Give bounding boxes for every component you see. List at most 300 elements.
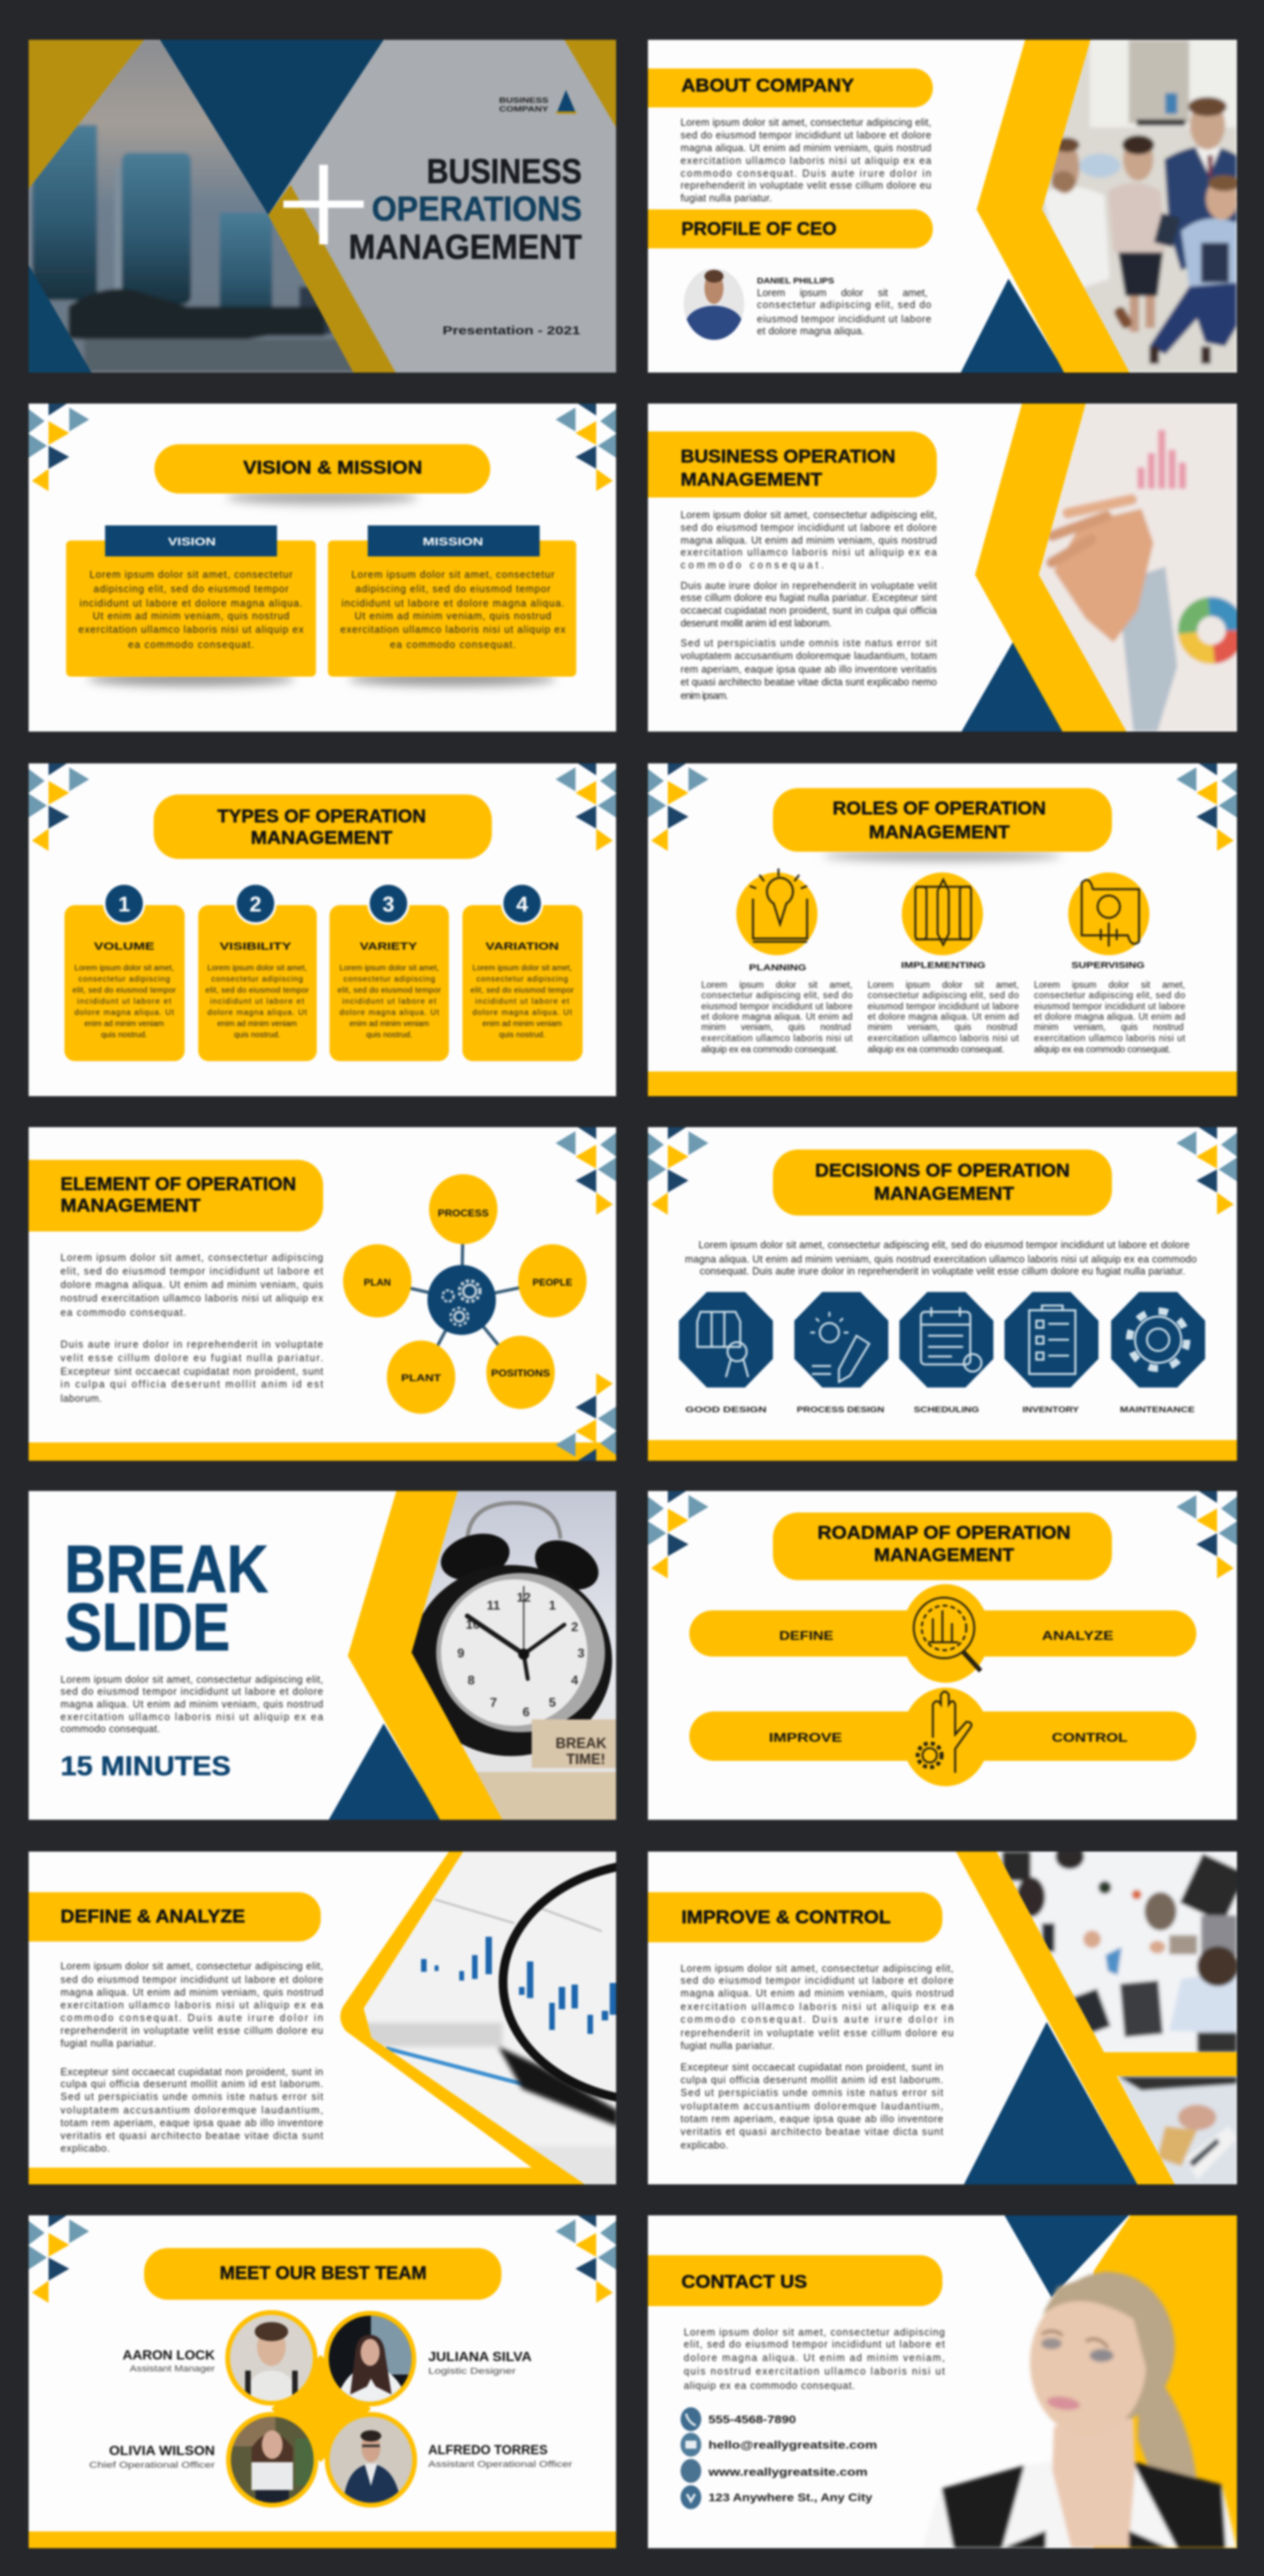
presentation date: Presentation - 2021 <box>443 324 580 338</box>
role: aaron: Assistant Manager <box>130 2364 215 2374</box>
body text: Sed ut perspiciatis unde omnis iste natus error sit <box>681 638 938 649</box>
text: variation <box>470 964 575 1040</box>
text: volume: enim ad minim veniam <box>84 1020 164 1028</box>
yellow diagonal and branch <box>956 1852 1237 2184</box>
body text: exercitation ullamco laboris nisi ut aliquip ex ea <box>681 547 937 558</box>
icon: magnifier with chart <box>914 1598 981 1671</box>
band: define and analyze <box>689 1584 1196 1683</box>
body text: culpa qui officia deserunt mollit anim id est laborum. <box>60 2078 323 2090</box>
heading pill: profile of ceo <box>624 209 933 248</box>
text column 1: aliquip ex ea commodo consequat. <box>701 1045 838 1055</box>
heading: TYPES OF OPERATION <box>217 806 426 826</box>
body text: deserunt mollit anim id est laborum. <box>681 618 832 629</box>
navy triangle <box>329 1723 441 1820</box>
digit 1: 1 <box>118 892 131 916</box>
cover title: BUSINESS <box>427 152 582 191</box>
corner triangles bottom right <box>556 1373 616 1461</box>
icon: scheduling <box>899 1292 993 1388</box>
yellow panel <box>1094 2215 1237 2548</box>
photo: alarm clock: 4 <box>572 1674 579 1688</box>
contact: email <box>681 2433 877 2457</box>
slide background <box>648 404 1237 732</box>
photo: olivia <box>228 2414 315 2506</box>
photo: alarm clock: 6 <box>523 1706 530 1719</box>
yellow triangle top left <box>29 40 144 189</box>
heading: MANAGEMENT <box>681 469 822 490</box>
body text <box>60 1961 324 2154</box>
body text: magna aliqua. Ut enim ad minim veniam, quis nostrud <box>60 1987 323 1998</box>
corner triangles left <box>648 1491 708 1579</box>
vision label: VISION <box>168 535 216 548</box>
slide 7: element of operation management <box>27 1126 618 1462</box>
heading pill <box>144 2248 501 2300</box>
heading pill <box>624 1892 942 1942</box>
text: volume: dolore magna aliqua. Ut <box>75 1009 174 1017</box>
heading <box>817 1522 1071 1565</box>
body text: elit, sed do eiusmod tempor incididunt ut labore et <box>60 1266 324 1277</box>
label: plant: PLANT <box>401 1372 442 1384</box>
corner triangles left <box>648 763 708 851</box>
slide 1: title cover <box>27 38 618 374</box>
navy triangle <box>962 640 1063 732</box>
street address: 123 Anywhere St., Any City <box>708 2491 872 2504</box>
heading pill <box>773 1512 1112 1580</box>
slide 6: roles of operation management <box>646 762 1239 1098</box>
body text: occaecat cupidatat non proident, sunt in culpa qui officia <box>681 605 937 616</box>
label: variation: VARIATION <box>486 940 559 952</box>
text: variation: dolore magna aliqua. Ut <box>473 1009 572 1017</box>
navy triangle <box>1005 2215 1129 2297</box>
member: aaron lock: AARON LOCK <box>123 2348 216 2363</box>
icon: maintenance <box>1111 1292 1205 1388</box>
corner triangles left <box>29 2215 89 2303</box>
body text: ea commodo consequat. <box>60 1307 186 1318</box>
labels under icons <box>685 1405 1195 1415</box>
body text: sed do eiusmod tempor incididunt ut labore et dolore <box>60 1686 323 1697</box>
mission text: Ut enim ad minim veniam, quis nostrud <box>355 611 552 622</box>
heading: MANAGEMENT <box>60 1195 201 1216</box>
slide 14: contact us <box>646 2214 1239 2550</box>
text column 1: exercitation ullamco laboris nisi ut <box>701 1034 853 1044</box>
body text: elit, sed do eiusmod tempor incididunt ut labore et <box>684 2339 946 2350</box>
label: process: PROCESS <box>438 1208 489 1219</box>
card: variety <box>330 884 449 1061</box>
vision tab <box>105 525 277 556</box>
slide background <box>648 2215 1237 2548</box>
corner triangles right <box>1176 1127 1237 1215</box>
text: variation: quis nostrud. <box>499 1031 545 1040</box>
ceo bio: et dolore magna aliqua. <box>757 326 864 337</box>
body text <box>681 1963 954 2151</box>
heading <box>833 798 1046 842</box>
vision text: Lorem ipsum dolor sit amet, consectetur <box>89 569 293 580</box>
body text: totam rem aperiam, eaque ipsa quae ab illo inventore <box>681 2113 943 2125</box>
labels under icons: INVENTORY <box>1022 1405 1079 1415</box>
text: volume <box>72 964 177 1040</box>
text column 2 <box>868 981 1020 1055</box>
icon: inventory <box>1005 1292 1098 1388</box>
role: alfredo: Assistant Operational Officer <box>428 2460 572 2469</box>
label: analyze: ANALYZE <box>1042 1630 1114 1643</box>
slide background <box>648 1127 1237 1461</box>
intro text: magna aliqua. Ut enim ad minim veniam, quis nostrud exercitation ullamco laboris nisi ut aliquip ex ea commodo <box>685 1254 1197 1265</box>
photo: alarm clock: 12 <box>517 1591 531 1605</box>
card: variation <box>462 884 583 1061</box>
text: volume: elit, sed do eiusmod tempor <box>72 986 177 995</box>
slide 11: define and analyze <box>27 1850 618 2186</box>
text: variety: quis nostrud. <box>366 1031 412 1040</box>
heading: DECISIONS OF OPERATION <box>815 1160 1070 1181</box>
icon: planning <box>736 868 817 955</box>
heading pill <box>154 444 490 494</box>
body text: voluptatem accusantium doloremque laudantium, totam <box>681 650 937 662</box>
slide 10: roadmap of operation management <box>646 1489 1239 1821</box>
heading: MANAGEMENT <box>874 1544 1014 1565</box>
text column 2: aliquip ex ea commodo consequat. <box>868 1045 1005 1055</box>
body text: in culpa qui officia deserunt mollit anim id est <box>60 1379 324 1390</box>
slide 9: break slide <box>27 1489 618 1821</box>
label: positions: POSITIONS <box>491 1368 550 1379</box>
ceo bio: eiusmod tempor incididunt ut labore <box>757 314 931 325</box>
slide 2: about company <box>646 38 1239 374</box>
slide background <box>648 1491 1237 1820</box>
label: volume: VOLUME <box>94 940 154 952</box>
body text: voluptatem accusantium doloremque laudantium, <box>60 2105 323 2116</box>
text column 2: et dolore magna aliqua. Ut enim ad <box>868 1013 1019 1022</box>
body text: magna aliqua. Ut enim ad minim veniam, quis nostrud <box>681 535 937 546</box>
slide background <box>648 763 1237 1096</box>
text: about company <box>681 117 931 204</box>
contact: website <box>681 2459 868 2483</box>
node: plan <box>343 1244 412 1317</box>
text column 2: exercitation ullamco laboris nisi ut <box>868 1034 1020 1044</box>
text: variety: consectetur adipiscing <box>344 975 435 984</box>
label: visibility: VISIBILITY <box>220 940 291 952</box>
body text: commodo consequat. Duis aute irure dolor in <box>681 2014 954 2025</box>
body text: quis nostrud exercitation ullamco laboris nisi ut <box>684 2366 946 2377</box>
vision text: adipiscing elit, sed do eiusmod tempor <box>94 584 288 595</box>
mission text <box>341 569 566 650</box>
text: about company: sed do eiusmod tempor incididunt ut labore et dolore <box>681 130 931 141</box>
body text: enim ipsam. <box>681 690 728 701</box>
label: improve: IMPROVE <box>769 1731 842 1745</box>
icon: process design <box>794 1292 888 1388</box>
photo: alarm clock: 9 <box>458 1647 465 1661</box>
body text <box>681 509 938 701</box>
heading pill <box>5 1160 323 1231</box>
text column 3: exercitation ullamco laboris nisi ut <box>1034 1034 1186 1044</box>
heading pill shadow <box>227 490 418 505</box>
body text: explicabo. <box>60 2143 110 2154</box>
break heading: BREAK <box>64 1532 268 1606</box>
yellow chevron <box>349 1491 501 1820</box>
photo: alarm clock: BREAK <box>556 1735 607 1751</box>
body text: Sed ut perspiciatis unde omnis iste natus error sit <box>681 2087 944 2098</box>
text column 3: et dolore magna aliqua. Ut enim ad <box>1034 1013 1185 1022</box>
body text: totam rem aperiam, eaque ipsa quae ab illo inventore <box>60 2117 323 2129</box>
body text: veritatis et quasi architecto beatae vitae dicta sunt <box>681 2126 944 2137</box>
text column 1: consectetur adipiscing elit, sed do <box>701 991 852 1001</box>
corner triangles right <box>556 2215 616 2303</box>
number 2 <box>236 884 275 923</box>
navy triangle top <box>160 40 384 215</box>
mission label: MISSION <box>423 535 483 548</box>
slide 12: improve and control <box>646 1850 1239 2186</box>
number 4 <box>502 884 542 923</box>
member: olivia wilson <box>89 2443 215 2470</box>
text: visibility: elit, sed do eiusmod tempor <box>205 986 310 995</box>
node: plant <box>387 1341 455 1414</box>
white plus sign <box>283 165 364 244</box>
email address: hello@reallygreatsite.com <box>708 2438 877 2451</box>
corner triangles top right <box>556 1127 616 1215</box>
yellow corner top right <box>564 40 616 127</box>
corner triangles left <box>29 763 89 851</box>
card: volume <box>64 884 185 1061</box>
ceo bio: Lorem ipsum dolor sit amet, <box>757 287 927 299</box>
text: volume: quis nostrud. <box>101 1031 147 1040</box>
heading: MANAGEMENT <box>874 1183 1014 1204</box>
digit 3: 3 <box>382 892 395 916</box>
photo: alfredo <box>327 2414 415 2506</box>
digit 4: 4 <box>516 892 529 916</box>
body text: explicabo. <box>681 2140 728 2151</box>
heading pill <box>624 2255 942 2306</box>
body text: Lorem ipsum dolor sit amet, consectetur adipiscing <box>684 2327 945 2338</box>
heading: profile of ceo: PROFILE OF CEO <box>681 218 837 239</box>
labels under icons: MAINTENANCE <box>1120 1405 1195 1415</box>
slide 13: meet our best team <box>27 2214 618 2550</box>
yellow chevron <box>976 404 1126 732</box>
yellow chevron <box>977 40 1129 373</box>
member: olivia wilson: OLIVIA WILSON <box>109 2443 215 2458</box>
fifteen minutes: 15 MINUTES <box>60 1751 231 1782</box>
label: variety: VARIETY <box>360 940 417 952</box>
corner triangles right <box>1176 1491 1237 1579</box>
photo: magnifier over chart <box>365 1852 618 2184</box>
body text: sed do eiusmod tempor incididunt ut labore et dolore <box>60 1974 323 1985</box>
text: visibility: quis nostrud. <box>234 1031 280 1040</box>
mission text: adipiscing elit, sed do eiusmod tempor <box>355 584 551 595</box>
text: about company: reprehenderit in voluptate velit esse cillum dolore eu <box>681 180 931 191</box>
navy triangle bottom left <box>29 265 92 373</box>
member: juliana silva <box>428 2349 532 2376</box>
mission text: Lorem ipsum dolor sit amet, consectetur <box>352 569 554 580</box>
body text: Lorem ipsum dolor sit amet, consectetur adipiscing elit, <box>60 1674 323 1685</box>
text: variation: enim ad minim veniam <box>482 1020 562 1028</box>
body text: fugiat nulla pariatur. <box>60 2038 156 2049</box>
label: supervising: SUPERVISING <box>1071 961 1145 970</box>
label: define: DEFINE <box>779 1630 833 1643</box>
body text: exercitation ullamco laboris nisi ut aliquip ex ea <box>681 2001 954 2012</box>
heading pill <box>5 1892 321 1942</box>
heading: VISION & MISSION <box>244 457 422 478</box>
text: variety: dolore magna aliqua. Ut <box>339 1009 439 1017</box>
panel: mission card <box>328 525 576 677</box>
photo: documents on desk <box>1110 2074 1237 2186</box>
icon: supervising <box>1068 872 1149 955</box>
slide background <box>29 2215 616 2548</box>
heading <box>681 446 895 490</box>
heading pill <box>773 788 1112 852</box>
photo: alarm clock: 11 <box>487 1599 501 1613</box>
body text: magna aliqua. Ut enim ad minim veniam, quis nostrud <box>60 1699 323 1710</box>
photo: smiling woman <box>923 2271 1237 2548</box>
node: process <box>429 1174 497 1244</box>
corner triangles left <box>29 404 89 491</box>
text: variety: elit, sed do eiusmod tempor <box>337 986 442 995</box>
heading <box>217 806 426 848</box>
photo: city skyline <box>29 40 363 373</box>
heading: BUSINESS OPERATION <box>681 446 895 466</box>
intro text: Lorem ipsum dolor sit amet, consectetur adipiscing elit, sed do eiusmod tempor incididunt ut labore et dolore <box>699 1239 1190 1251</box>
text: about company: magna aliqua. Ut enim ad minim veniam, quis nostrud <box>681 142 931 154</box>
corner triangles right <box>1176 763 1237 851</box>
text: variation: elit, sed do eiusmod tempor <box>470 986 575 995</box>
heading pill <box>773 1149 1112 1216</box>
ceo bio <box>757 287 931 337</box>
heading: MEET OUR BEST TEAM <box>220 2262 427 2283</box>
slide background <box>29 1127 616 1461</box>
photo: alarm clock: 1 <box>549 1599 556 1613</box>
heading: CONTACT US <box>681 2271 807 2292</box>
phone number: 555-4568-7890 <box>708 2413 796 2426</box>
company logo: COMPANY <box>499 105 548 113</box>
member: aaron lock <box>123 2348 216 2374</box>
text: visibility: Lorem ipsum dolor sit amet, <box>207 964 307 973</box>
bottom bar <box>648 1071 1237 1096</box>
heading: MANAGEMENT <box>869 822 1009 842</box>
body text: fugiat nulla pariatur. <box>681 2040 774 2051</box>
text: visibility: dolore magna aliqua. Ut <box>207 1009 307 1017</box>
mission tab <box>368 525 540 556</box>
cover title: MANAGEMENT <box>349 228 582 267</box>
vision text: exercitation ullamco laboris nisi ut aliquip ex <box>78 624 304 635</box>
text column 1 <box>701 981 853 1055</box>
photo: team of four <box>1030 40 1241 373</box>
body text: Sed ut perspiciatis unde omnis iste natus error sit <box>60 2091 324 2102</box>
text column 3: consectetur adipiscing elit, sed do <box>1034 991 1185 1001</box>
text column 2: minim veniam, quis nostrud <box>868 1023 1017 1032</box>
yellow frame and bottom bar <box>29 1852 585 2184</box>
text column 3 <box>1034 981 1186 1055</box>
text: visibility: incididunt ut labore et <box>210 997 304 1006</box>
card: visibility <box>198 884 317 1061</box>
body text <box>60 1252 324 1404</box>
digit 2: 2 <box>249 892 262 916</box>
slide 5: types of operation management <box>27 762 618 1098</box>
icon: hand with gear <box>918 1692 971 1773</box>
body text: voluptatem accusantium doloremque laudantium, <box>681 2101 943 2112</box>
slide background <box>648 1852 1237 2184</box>
member: juliana silva: JULIANA SILVA <box>428 2349 532 2364</box>
labels under icons: SCHEDULING <box>914 1405 979 1415</box>
text: variety: Lorem ipsum dolor sit amet, <box>339 964 439 973</box>
heading: IMPROVE & CONTROL <box>681 1907 891 1927</box>
text column 2: consectetur adipiscing elit, sed do <box>868 991 1019 1001</box>
number 1 <box>104 884 144 923</box>
body text: Duis aute irure dolor in reprehenderit in voluptate velit <box>681 580 938 591</box>
contact: phone <box>681 2407 796 2431</box>
body text: velit esse cillum dolore eu fugiat nulla pariatur. <box>60 1352 323 1364</box>
ceo name: DANIEL PHILLIPS <box>757 277 834 286</box>
cover background <box>29 40 616 373</box>
body text: sed do eiusmod tempor incididunt ut labore et dolore <box>681 522 937 533</box>
band: improve and control <box>689 1688 1196 1786</box>
break heading <box>64 1532 268 1665</box>
role: olivia: Chief Operational Officer <box>89 2461 215 2470</box>
vision text: Ut enim ad minim veniam, quis nostrud <box>92 611 290 622</box>
heading: MANAGEMENT <box>251 827 392 848</box>
slide background <box>648 40 1237 373</box>
body text: rem aperiam, eaque ipsa quae ab illo inventore veritatis <box>681 664 937 675</box>
role: juliana: Logistic Designer <box>428 2367 516 2376</box>
heading pill shadow <box>823 850 1062 861</box>
mission text: incididunt ut labore et dolore magna aliqua. <box>341 598 564 609</box>
photo: alarm clock: 2 <box>572 1621 579 1634</box>
slide 3: vision and mission <box>27 402 618 733</box>
slide background <box>29 1491 616 1820</box>
body text: dolore magna aliqua. Ut enim ad minim veniam, quis <box>60 1279 323 1290</box>
text: visibility: enim ad minim veniam <box>217 1020 297 1028</box>
bottom bar <box>29 1442 616 1461</box>
body text: reprehenderit in voluptate velit esse cillum dolore eu <box>60 2025 323 2036</box>
text: visibility <box>205 964 310 1040</box>
body text: Duis aute irure dolor in reprehenderit in voluptate <box>60 1339 323 1350</box>
yellow diagonal band <box>268 185 396 373</box>
labels under icons: GOOD DESIGN <box>685 1405 767 1415</box>
body text: reprehenderit in voluptate velit esse cillum dolore eu <box>681 2028 954 2039</box>
text column 1: et dolore magna aliqua. Ut enim ad <box>701 1013 852 1022</box>
body text: aliquip ex ea commodo consequat. <box>684 2380 855 2391</box>
body text: Excepteur sint occaecat cupidatat non proident, sunt in <box>60 2067 323 2078</box>
text column 1: minim veniam, quis nostrud <box>701 1023 851 1032</box>
body text: Lorem ipsum dolor sit amet, consectetur adipiscing elit, <box>681 509 937 521</box>
corner triangles right <box>556 404 616 491</box>
ceo bio: consectetur adipiscing elit, sed do <box>757 299 931 310</box>
heading: ELEMENT OF OPERATION <box>60 1173 296 1194</box>
photo: meeting from above <box>990 1844 1246 2052</box>
number 3 <box>369 884 408 923</box>
navy triangle <box>964 2022 1137 2184</box>
label: planning: PLANNING <box>749 963 806 973</box>
yellow circles backdrop <box>225 2310 417 2508</box>
heading <box>60 1173 296 1216</box>
break heading: SLIDE <box>64 1590 230 1665</box>
label: plan: PLAN <box>364 1277 391 1288</box>
photo: alarm clock: TIME! <box>567 1751 605 1767</box>
label: control: CONTROL <box>1052 1731 1128 1745</box>
photo: alarm clock: 5 <box>549 1696 556 1710</box>
text: variety <box>337 964 442 1040</box>
heading pill: about company <box>624 68 933 107</box>
body text: exercitation ullamco laboris nisi ut aliquip ex ea <box>60 1711 323 1723</box>
body text <box>684 2327 946 2391</box>
vision text: incididunt ut labore et dolore magna aliqua. <box>80 598 302 609</box>
cover title <box>349 152 582 267</box>
slide 4: business operation management <box>646 402 1239 733</box>
diagram: five elements <box>343 1174 587 1414</box>
photo: aaron <box>228 2311 315 2406</box>
text: volume: incididunt ut labore et <box>77 997 171 1006</box>
body text: commodo consequat. <box>681 560 824 571</box>
text column 3: minim veniam, quis nostrud <box>1034 1023 1184 1032</box>
center hub with gears <box>427 1265 496 1335</box>
photo: hand over charts <box>1030 404 1237 732</box>
contact: address <box>681 2485 872 2509</box>
text column 3: aliquip ex ea commodo consequat. <box>1034 1045 1171 1055</box>
node: people <box>518 1244 587 1317</box>
